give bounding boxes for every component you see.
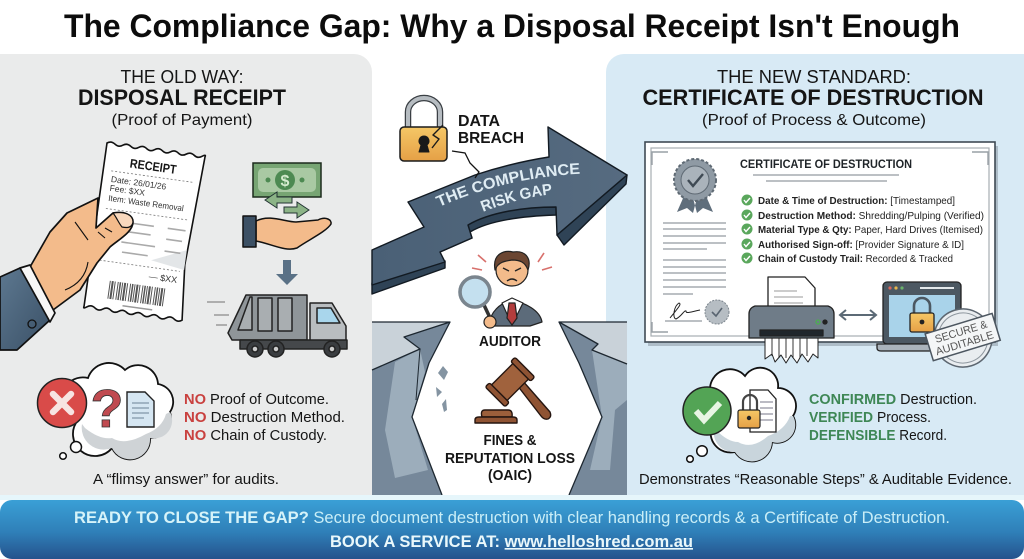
arrow: down to truck bbox=[276, 260, 298, 285]
list: missing items: NO Destruction Method. bbox=[184, 410, 345, 426]
checklist: Chain of Custody Trail: Recorded & Tracked bbox=[758, 254, 953, 265]
thought bubble: no proof bbox=[38, 363, 173, 459]
falling rock debris bbox=[436, 366, 448, 412]
list: confirmed items: DEFENSIBLE Record. bbox=[809, 428, 947, 444]
heading: old way: (Proof of Payment) bbox=[112, 112, 252, 129]
receipt bbox=[84, 141, 205, 322]
label: data breach bbox=[458, 113, 524, 147]
stamp: secure and auditable bbox=[921, 300, 1005, 376]
arrow label: THE COMPLIANCE bbox=[435, 163, 580, 206]
list: confirmed items: VERIFIED Process. bbox=[809, 410, 931, 426]
list: missing items: NO Proof of Outcome. bbox=[184, 392, 329, 408]
chasm: left cliff bbox=[372, 322, 450, 495]
stamp: secure and auditable: AUDITABLE bbox=[934, 329, 995, 358]
arrow label: RISK GAP bbox=[480, 184, 552, 212]
icon: garbage truck bbox=[207, 295, 347, 357]
checklist bbox=[742, 194, 984, 265]
checklist: Date & Time of Destruction: [Timestamped] bbox=[758, 196, 955, 207]
list: missing items bbox=[184, 392, 345, 444]
icon: laptop with lock bbox=[877, 282, 966, 351]
text lines placeholder bbox=[663, 223, 726, 321]
receipt: Fee: $XX bbox=[109, 183, 146, 198]
heading: new standard: CERTIFICATE OF DESTRUCTION bbox=[642, 85, 984, 110]
thought bubble: no proof: ? bbox=[90, 379, 124, 439]
heading: new standard bbox=[642, 67, 984, 129]
heading: old way bbox=[78, 67, 287, 129]
panel: new standard bbox=[606, 54, 1024, 495]
receipt: RECEIPT bbox=[129, 156, 178, 177]
hand holding receipt bbox=[0, 198, 133, 350]
chasm: right cliff bbox=[559, 322, 627, 495]
caption: flimsy answer: A “flimsy answer” for audits. bbox=[93, 472, 279, 488]
label: fines and reputation loss bbox=[445, 432, 575, 484]
breach crack line bbox=[452, 151, 479, 178]
label: fines and reputation loss: FINES & bbox=[484, 432, 537, 449]
label: data breach: BREACH bbox=[458, 130, 524, 147]
label: data breach: DATA bbox=[458, 113, 500, 130]
receipt: Item: Waste Removal bbox=[108, 193, 184, 213]
icon: cash bill: $ bbox=[281, 173, 290, 190]
label: fines and reputation loss: REPUTATION LOSS bbox=[445, 450, 575, 467]
certificate document bbox=[645, 142, 998, 346]
heading: old way: THE OLD WAY: bbox=[120, 67, 244, 87]
icon: rosette seal bbox=[674, 159, 716, 213]
icon: gavel bbox=[475, 357, 551, 423]
label: fines and reputation loss: (OAIC) bbox=[488, 467, 532, 484]
heading: old way: DISPOSAL RECEIPT bbox=[78, 85, 287, 110]
call-to-action banner bbox=[0, 495, 1024, 559]
icon: cash bill bbox=[253, 163, 321, 218]
icon: auditor bbox=[460, 251, 552, 328]
thought bubble: confirmed bbox=[683, 368, 796, 462]
icon: open hand bbox=[243, 216, 331, 249]
label: auditor: AUDITOR bbox=[479, 334, 541, 350]
heading: new standard: (Proof of Process & Outcome) bbox=[702, 112, 926, 129]
heading: new standard: THE NEW STANDARD: bbox=[717, 67, 911, 87]
banner line 1: READY TO CLOSE THE GAP? Secure document destruction with clear handling records & a Certificate of Destruction. bbox=[74, 509, 950, 527]
arrow: two-way link bbox=[840, 310, 876, 320]
banner line 2: BOOK A SERVICE AT: www.helloshred.com.au bbox=[330, 533, 693, 551]
checklist: Authorised Sign-off: [Provider Signature & ID] bbox=[758, 240, 964, 251]
signature and stamp bbox=[670, 300, 729, 324]
list: missing items: NO Chain of Custody. bbox=[184, 428, 327, 444]
stamp: secure and auditable: SECURE & bbox=[934, 318, 989, 346]
receipt: Date: 26/01/26 bbox=[110, 174, 167, 192]
list: confirmed items: CONFIRMED Destruction. bbox=[809, 392, 977, 408]
title: The Compliance Gap: Why a Disposal Receipt Isn't Enough bbox=[64, 8, 960, 44]
icon: shredder bbox=[749, 277, 834, 363]
certificate title: CERTIFICATE OF DESTRUCTION bbox=[740, 159, 912, 171]
caption: reasonable steps: Demonstrates “Reasonable Steps” & Auditable Evidence. bbox=[639, 472, 1012, 488]
arrow: compliance risk gap bbox=[371, 126, 628, 295]
checklist: Destruction Method: Shredding/Pulping (Verified) bbox=[758, 211, 984, 222]
checklist: Material Type & Qty: Paper, Hard Drives (Itemised) bbox=[758, 225, 983, 236]
list: confirmed items bbox=[809, 392, 977, 444]
receipt: — $XX bbox=[148, 271, 178, 285]
icon: broken padlock bbox=[400, 98, 447, 161]
panel: old way bbox=[0, 54, 372, 495]
